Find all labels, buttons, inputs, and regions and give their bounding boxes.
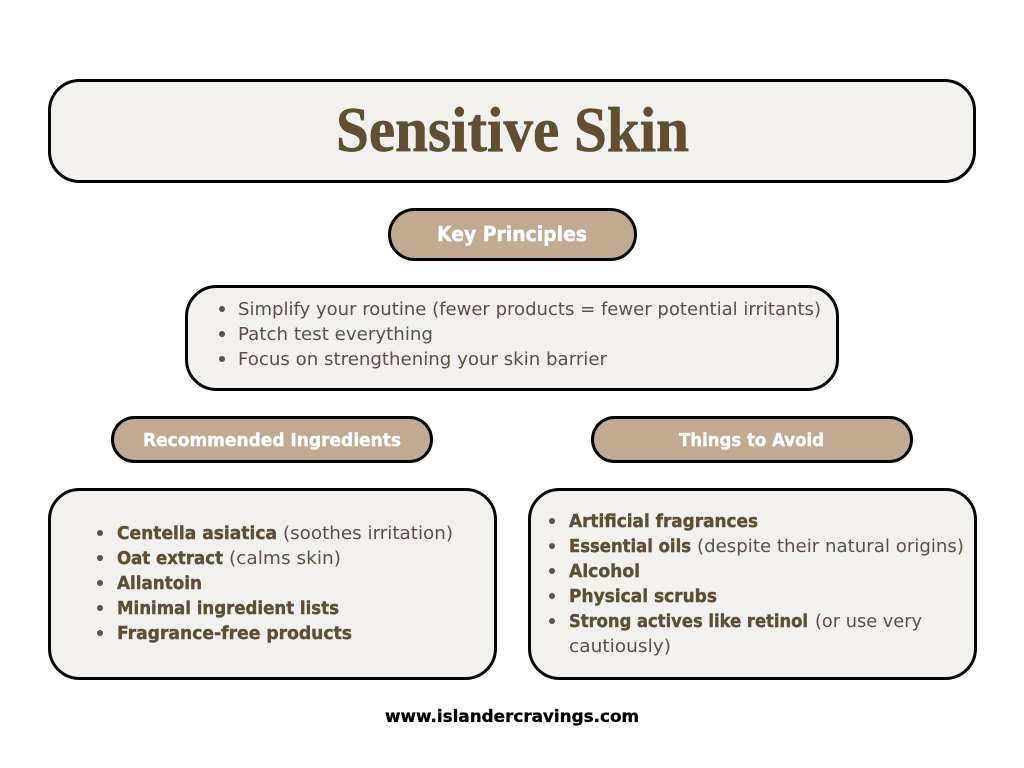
heading: key principles: Key Principles xyxy=(437,222,587,246)
heading: things to avoid: Things to Avoid xyxy=(679,430,824,451)
panel: key principles list xyxy=(186,286,838,390)
panel: recommended ingredients list: Oat extract xyxy=(117,548,223,569)
panel: recommended ingredients list: Fragrance-free products xyxy=(117,623,352,644)
heading: things to avoid xyxy=(592,418,912,462)
heading: recommended ingredients xyxy=(112,418,432,462)
panel: things to avoid list: Physical scrubs xyxy=(569,586,717,607)
panel: things to avoid list: Strong actives like retinol xyxy=(569,611,808,632)
title panel xyxy=(50,80,974,182)
panel: things to avoid list: (despite their natural origins) xyxy=(697,536,964,557)
heading: recommended ingredients: Recommended Ingredients xyxy=(143,430,401,451)
panel: key principles list: Focus on strengthening your skin barrier xyxy=(238,349,608,370)
panel: recommended ingredients list: Centella asiatica xyxy=(117,523,277,544)
panel: things to avoid list xyxy=(530,490,976,678)
footer website: www.islandercravings.com xyxy=(385,707,639,727)
panel: recommended ingredients list xyxy=(50,490,496,678)
panel: key principles list: Simplify your routine (fewer products = fewer potential irritants) xyxy=(238,299,821,320)
heading: key principles xyxy=(390,210,636,260)
title: Sensitive Skin xyxy=(336,94,689,165)
panel: things to avoid list: Artificial fragrances xyxy=(569,511,758,532)
panel: things to avoid list: Essential oils xyxy=(569,536,691,557)
panel: things to avoid list: (or use very xyxy=(815,611,922,632)
panel: recommended ingredients list: (calms skin) xyxy=(229,548,341,569)
panel: recommended ingredients list: Allantoin xyxy=(117,573,202,594)
panel: key principles list: Patch test everything xyxy=(238,324,433,345)
panel: recommended ingredients list: Minimal ingredient lists xyxy=(117,598,339,619)
panel: things to avoid list: cautiously) xyxy=(569,636,671,657)
panel: things to avoid list: Alcohol xyxy=(569,561,640,582)
panel: recommended ingredients list: (soothes irritation) xyxy=(283,523,453,544)
